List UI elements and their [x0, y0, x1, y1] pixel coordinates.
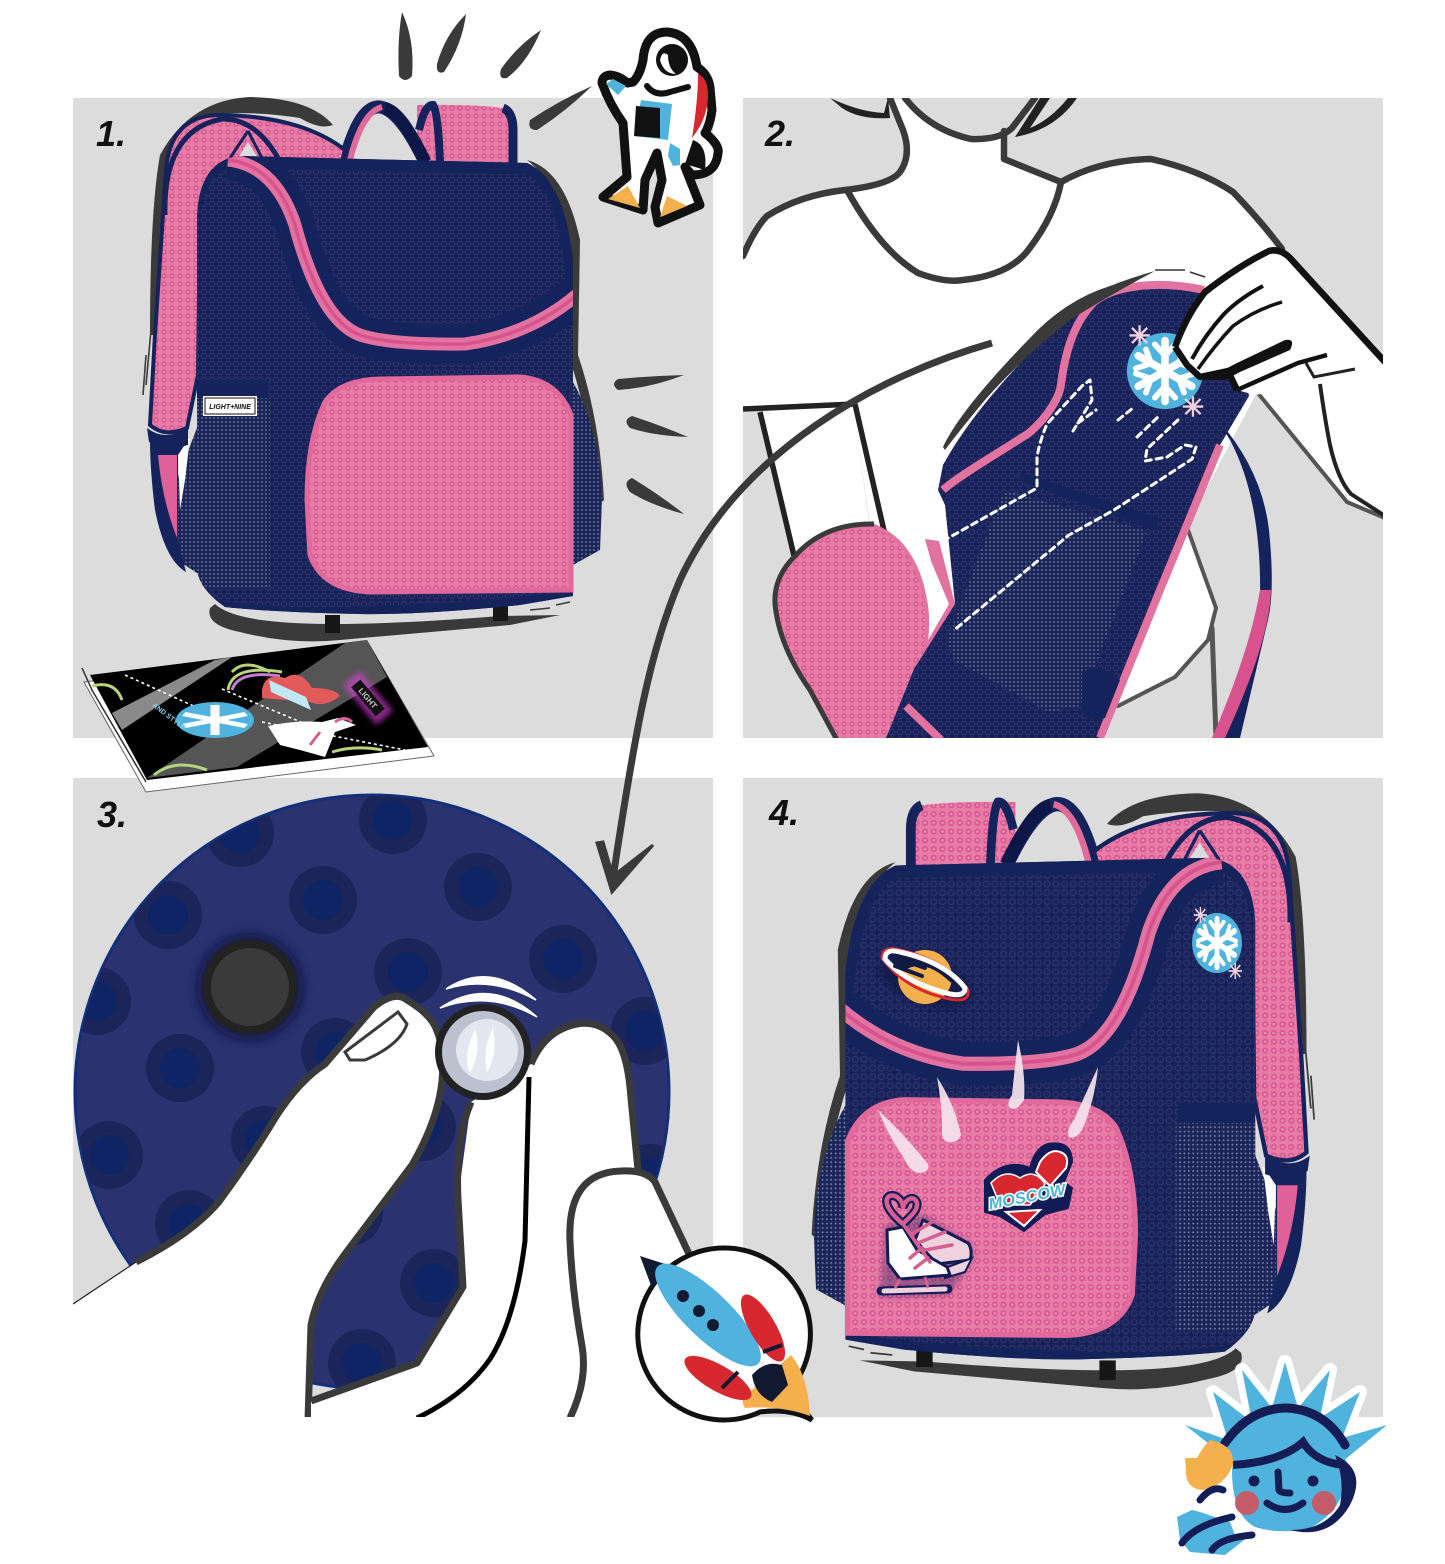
torch flame [1185, 1440, 1233, 1490]
backpack brand tag: LIGHT+NINE [209, 404, 251, 411]
strap frame lines [743, 404, 885, 560]
step number 4: 4. [768, 792, 799, 833]
badge: heart Moscow [985, 1143, 1072, 1231]
thumb and palm [73, 996, 443, 1420]
sticker sheet [82, 640, 434, 792]
badge: snowflake [1192, 907, 1242, 979]
step number 3: 3. [97, 794, 127, 835]
panel 3: pressing the button [63, 786, 700, 1420]
white motion marks [878, 1040, 1098, 1173]
rocket sticker [638, 1248, 812, 1420]
backpack front view [143, 97, 604, 641]
curved arrow from step 2 to step 3 [597, 343, 992, 892]
raised arm [1177, 1510, 1253, 1555]
motion arcs above stud [440, 977, 537, 1017]
panel backgrounds [73, 98, 1383, 1417]
hand holding the badge [1175, 250, 1385, 516]
backpack brand tag [203, 396, 257, 416]
backpack seen from above [886, 270, 1272, 740]
brush strokes: motion marks around astronaut [398, 12, 688, 514]
navy fabric circle [75, 795, 669, 1389]
backpack with badges [812, 793, 1314, 1389]
sticker sheet: AND STYLE [151, 702, 187, 732]
fabric dots [63, 786, 684, 1397]
badge: heart Moscow: MOSCOW [987, 1181, 1069, 1213]
step number 1: 1. [96, 113, 126, 154]
statue of liberty sticker [1177, 1362, 1387, 1556]
person torso [743, 98, 1383, 706]
crown outline [1185, 1362, 1387, 1530]
panel 1: backpack and sticker sheet [82, 12, 718, 792]
index and middle fingers [311, 1023, 700, 1420]
panel 2: attaching through the flap [743, 98, 1385, 740]
panel 4: finished backpack [768, 792, 1314, 1389]
silver stud [435, 1004, 531, 1100]
chin and hair marks [830, 98, 1077, 137]
black back button [198, 935, 302, 1039]
thumbnail [345, 1012, 407, 1060]
finger gap line [417, 1077, 529, 1418]
badge: planet [874, 946, 978, 1018]
astronaut sticker [602, 32, 718, 223]
pink back panel [775, 526, 927, 740]
snowflake badge in panel 2 [1127, 325, 1203, 417]
crown rays [1185, 1362, 1387, 1480]
sticker sheet: LIGHT [356, 686, 379, 710]
step number 2: 2. [764, 113, 795, 154]
person outline [743, 98, 1385, 738]
badge: ice skate [880, 1196, 972, 1298]
